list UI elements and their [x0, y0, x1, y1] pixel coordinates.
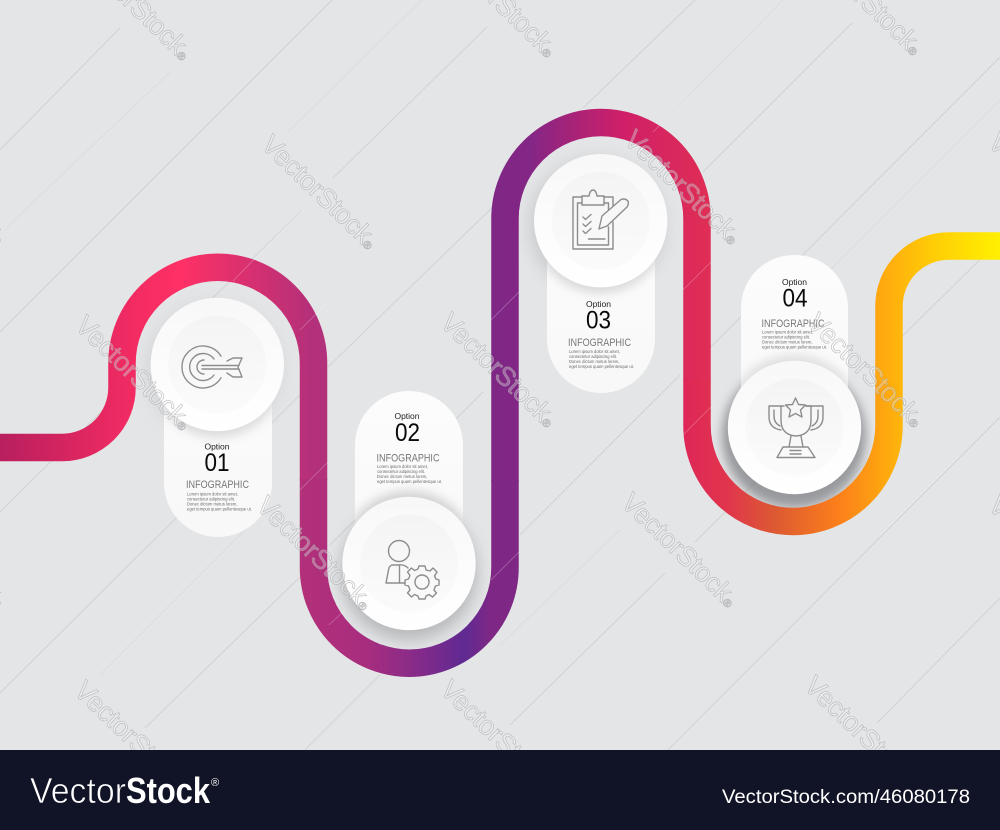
watermarks: VectorStock®	[70, 310, 198, 436]
inner circle 02	[360, 514, 458, 612]
watermarks: VectorStock®	[435, 307, 563, 433]
body text 03: Donec dictum metus lorem,	[569, 359, 620, 365]
heading 04: INFOGRAPHIC	[762, 318, 825, 330]
pill card 02	[355, 391, 463, 591]
shadows inside the road bends	[146, 158, 866, 640]
icon: clipboard and pencil	[573, 190, 628, 249]
inner circle 01	[168, 315, 266, 413]
footer logo: ®	[211, 777, 219, 789]
footer image id: VectorStock.com/46080178	[722, 786, 970, 808]
watermarks: VectorStock®	[802, 307, 930, 433]
body text 04: Lorem ipsum dolor sit amet,	[762, 330, 813, 336]
circle badge 02	[342, 497, 476, 630]
body text 01: consectetur adipiscing elit.	[187, 496, 235, 502]
winding gradient road	[0, 123, 1000, 663]
watermarks: VectorStock®	[435, 674, 563, 800]
number 03: 03	[586, 306, 611, 334]
option label 03: Option	[586, 299, 611, 309]
icon: target with arrow	[182, 346, 242, 388]
body text 02: consectetur adipiscing elit.	[377, 469, 425, 475]
body text 02: Donec dictum metus lorem,	[377, 474, 428, 480]
heading 01: INFOGRAPHIC	[186, 479, 249, 491]
panel: step 04	[727, 255, 861, 494]
body text 04: eget tempus quam pellentesque ut.	[762, 344, 827, 350]
circle shadow on card 02	[355, 487, 463, 524]
circle shadow on card 04	[741, 352, 848, 388]
body text 02: eget tempus quam pellentesque ut.	[377, 479, 442, 485]
footer logo: Stock	[126, 770, 211, 811]
body text 03	[569, 349, 634, 370]
body text 03: consectetur adipiscing elit.	[569, 354, 617, 360]
body text 03: eget tempus quam pellentesque ut.	[569, 364, 634, 370]
watermarks: VectorStock®	[69, 675, 197, 801]
pill card 03	[547, 200, 655, 393]
body text 04	[762, 330, 827, 350]
circle badge 01	[151, 298, 284, 431]
watermarks: VectorStock®	[251, 490, 379, 616]
body text 02	[377, 464, 442, 485]
option label 01: Option	[204, 442, 230, 452]
body text 01	[187, 492, 252, 512]
inner circle 03	[552, 172, 650, 270]
body text 04: consectetur adipiscing elit.	[762, 334, 810, 340]
circle shadow on card 01	[164, 403, 272, 440]
number 04: 04	[782, 285, 808, 313]
watermarks: VectorStock®	[616, 487, 744, 613]
footer logo: Vector	[30, 770, 126, 811]
footer logo	[30, 770, 219, 811]
body text 04: Donec dictum metus lorem,	[762, 340, 812, 346]
panel: step 02	[342, 391, 476, 630]
footer bar	[0, 750, 1000, 830]
body text 01: Donec dictum metus lorem,	[187, 502, 238, 508]
panel: step 03	[533, 154, 667, 393]
body text 01: Lorem ipsum dolor sit amet,	[187, 492, 238, 498]
heading 03: INFOGRAPHIC	[568, 337, 631, 349]
heading 02: INFOGRAPHIC	[376, 452, 440, 464]
option label 02: Option	[394, 411, 420, 421]
icon: trophy with star	[769, 398, 823, 458]
watermarks: VectorStock®	[799, 670, 927, 796]
option label 04: Option	[782, 277, 807, 287]
circle badge 03	[534, 154, 667, 287]
body text 03: Lorem ipsum dolor sit amet,	[569, 349, 620, 355]
pill card 04	[741, 255, 848, 455]
number 02: 02	[395, 419, 420, 447]
pill card 01	[164, 300, 272, 537]
circle badge 04	[728, 361, 861, 494]
panel: step 01	[150, 298, 284, 537]
icon: person with gear	[386, 540, 439, 599]
circle shadow on card 03	[547, 260, 655, 296]
body text 02: Lorem ipsum dolor sit amet,	[377, 464, 428, 470]
number 01: 01	[204, 449, 230, 477]
inner circle 04	[746, 378, 844, 476]
watermarks: VectorStock®	[619, 124, 747, 250]
body text 01: eget tempus quam pellentesque ut.	[187, 506, 252, 512]
watermarks: VectorStock®	[256, 129, 384, 255]
